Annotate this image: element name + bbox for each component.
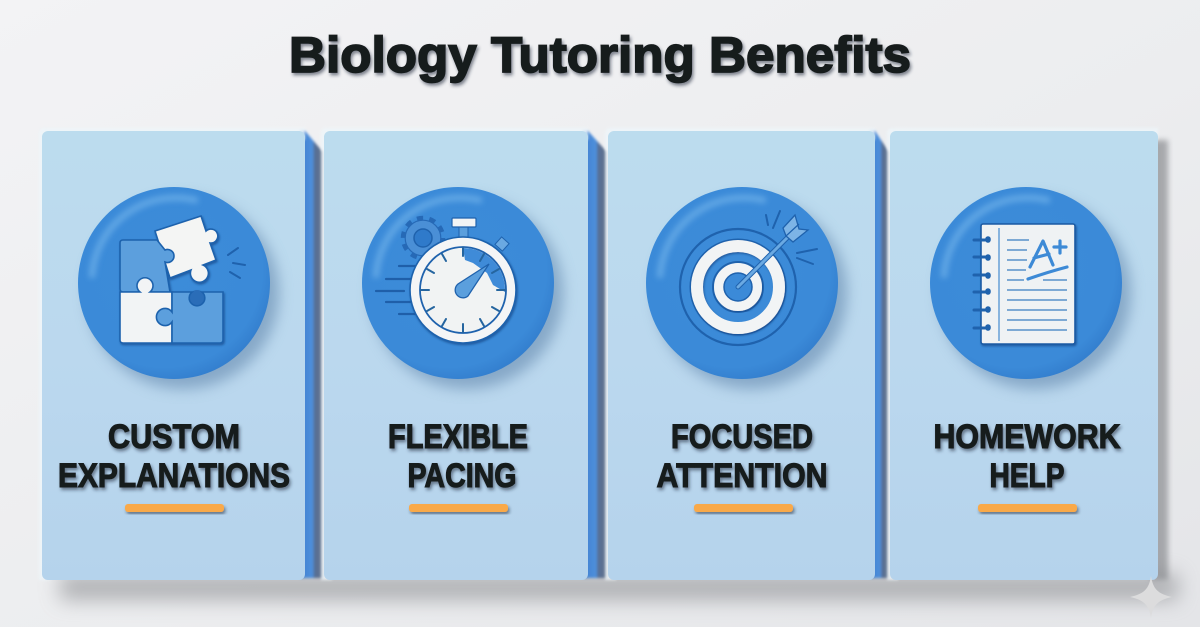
orange underline [125,504,224,512]
icon: stopwatch [376,218,516,343]
spark lines [766,211,817,264]
card rim [887,128,1158,580]
disc shadow [87,197,279,389]
grade A plus [1028,241,1067,279]
crown stem [459,226,468,238]
panel: homework help [887,128,1168,580]
card rim [39,128,305,580]
shadow band below the cards [60,574,1178,600]
label line 2: EXPLANATIONS [58,457,290,495]
gear ring [410,225,436,251]
label [58,418,290,495]
card face [324,131,588,580]
watch face [420,247,506,333]
paper [981,224,1075,344]
ruled lines [1007,240,1067,330]
fletching split [786,224,799,236]
card rim [605,128,875,580]
card rim [321,128,588,580]
ticks [421,248,505,332]
card side edge [300,131,323,578]
puzzle piece bottom left [120,278,172,343]
disc highlight [376,198,479,275]
crown [452,218,476,227]
arrow shaft [738,238,787,287]
disc [362,187,554,379]
label line 1: CUSTOM [108,418,240,456]
panel: custom explanations [39,128,323,580]
margin line [998,228,1000,341]
disc [646,187,838,379]
label line 1: FLEXIBLE [388,418,528,456]
puzzle notch [189,290,205,306]
icon: notebook [974,224,1075,344]
disc highlight [660,198,763,275]
label [656,418,828,495]
disc highlight [944,198,1047,275]
label line 2: PACING [408,457,516,495]
inner white ring [719,268,757,306]
white ring outline [690,240,786,334]
floating puzzle piece [155,216,218,282]
arrow fletching [783,215,808,242]
icon: target [680,211,817,345]
label [388,418,528,495]
icon: puzzle [120,216,223,343]
spark lines [228,248,245,278]
card side shadow [1150,140,1168,580]
card face [890,131,1158,580]
panel: flexible pacing [321,128,607,580]
disc [930,187,1122,379]
gear teeth [404,218,442,258]
orange underline [694,504,793,512]
elapsed wedge [463,248,505,292]
gear hole outline [414,229,432,247]
speed lines [376,266,415,314]
label line 1: HOMEWORK [934,418,1121,456]
hand [455,264,489,298]
title: Biology Tutoring Benefits [289,27,911,83]
orange underline [978,504,1077,512]
inner ring outline [713,262,763,312]
label line 2: HELP [990,457,1064,495]
disc highlight [92,198,195,275]
disc shadow [371,197,563,389]
disc [78,187,270,379]
outer ring [680,229,796,345]
card face [608,131,875,580]
disc shadow [939,197,1131,389]
label line 1: FOCUSED [671,418,813,456]
label [934,418,1121,495]
side button [495,237,509,251]
puzzle piece top left [120,240,174,292]
label line 2: ATTENTION [656,457,828,495]
card face [42,131,305,580]
disc shadow [655,197,847,389]
gear [404,218,442,258]
bullseye [724,273,752,301]
white ring [697,246,779,328]
arrow shaft core [738,238,787,287]
icon: sparkle watermark [1130,576,1172,618]
panel: focused attention [605,128,889,580]
spiral rings [974,240,988,328]
card side edge [583,131,607,578]
puzzle piece bottom right [156,292,223,343]
gear ring outline [405,220,441,256]
card side edge [870,131,889,578]
watch body [410,237,516,343]
spiral holes [985,239,991,328]
orange underline [409,504,508,512]
